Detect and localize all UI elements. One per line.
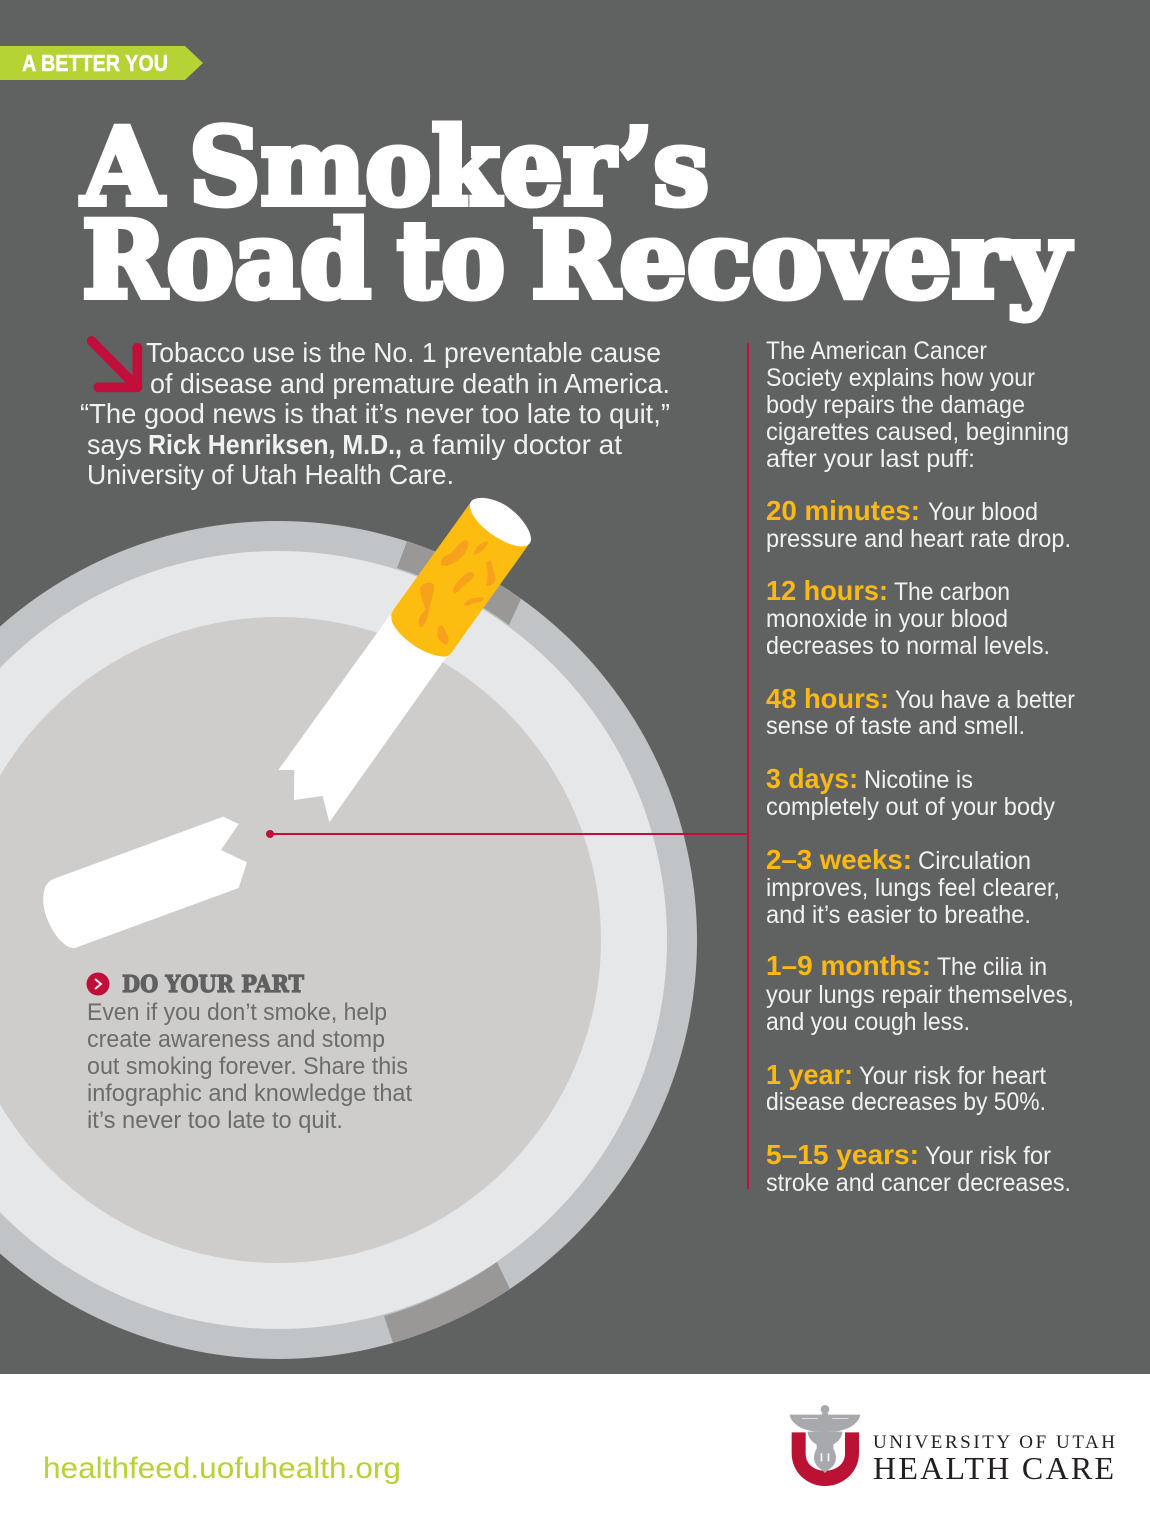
do your part callout: out smoking forever. Share this xyxy=(87,1053,408,1080)
milestone: 1-9 months xyxy=(766,950,1074,1036)
do your part callout: DO YOUR PART xyxy=(122,971,304,998)
title: Recovery xyxy=(531,197,1072,322)
logo wordmark xyxy=(873,1432,1115,1486)
footer band xyxy=(0,1374,1150,1518)
milestone: 5-15 years xyxy=(766,1139,1071,1197)
milestone: 1 year: disease decreases by 50%. xyxy=(766,1088,1046,1116)
intro text: “The good news is that it’s never too late to quit,” xyxy=(80,398,670,429)
intro text: says xyxy=(87,429,142,460)
milestone: 20 minutes: 20 minutes: xyxy=(766,495,920,526)
timeline connector xyxy=(266,343,749,1189)
milestone: 12 hours: 12 hours: xyxy=(766,575,888,606)
cigarette: broken butt piece xyxy=(43,817,247,948)
milestone: 3 days: 3 days: xyxy=(766,763,858,794)
title: Road xyxy=(82,197,371,322)
milestone: 1 year: Your risk for heart xyxy=(859,1062,1046,1090)
milestone: 3 days: Nicotine is xyxy=(864,766,973,794)
logo wordmark: HEALTH CARE xyxy=(873,1450,1114,1486)
intro text: of disease and premature death in America. xyxy=(150,368,670,399)
website url: healthfeed.uofuhealth.org xyxy=(43,1452,401,1485)
logo icon xyxy=(790,1405,860,1486)
milestone: 3 days xyxy=(766,763,1055,821)
milestone: 48 hours: You have a better xyxy=(895,686,1075,714)
milestone: 1 year xyxy=(766,1059,1046,1116)
do your part callout: it’s never too late to quit. xyxy=(87,1107,343,1134)
milestone: 12 hours: The carbon xyxy=(894,578,1010,606)
milestone: 20 minutes: pressure and heart rate drop. xyxy=(766,525,1071,553)
milestone: 48 hours xyxy=(766,683,1075,740)
title: Smoker’s xyxy=(189,104,709,229)
milestone: 2-3 weeks: 2–3 weeks: xyxy=(766,844,912,875)
timeline intro: cigarettes caused, beginning xyxy=(766,418,1069,446)
intro text: University of Utah Health Care. xyxy=(87,459,454,490)
timeline intro: The American Cancer xyxy=(766,337,987,365)
milestone: 1-9 months: 1–9 months: xyxy=(766,950,931,981)
milestone: 1-9 months: The cilia in xyxy=(937,953,1047,981)
milestone: 48 hours: 48 hours: xyxy=(766,683,889,714)
title xyxy=(81,104,1072,322)
milestone: 5-15 years: stroke and cancer decreases. xyxy=(766,1169,1071,1197)
intro text: a family doctor at xyxy=(409,429,622,460)
milestone: 2-3 weeks: Circulation xyxy=(918,847,1031,875)
milestone: 2-3 weeks: and it’s easier to breathe. xyxy=(766,901,1031,929)
ashtray xyxy=(0,521,697,1359)
milestone: 5-15 years: 5–15 years: xyxy=(766,1139,919,1170)
logo wordmark: UNIVERSITY OF UTAH xyxy=(873,1432,1115,1453)
timeline intro: after your last puff: xyxy=(766,445,975,473)
milestone: 12 hours: decreases to normal levels. xyxy=(766,632,1050,660)
cigarette: paper and filter xyxy=(278,498,531,822)
icon: red arrow xyxy=(92,341,137,387)
milestone: 2-3 weeks xyxy=(766,844,1060,929)
milestone: 1-9 months: your lungs repair themselves, xyxy=(766,981,1074,1009)
milestone: 2-3 weeks: improves, lungs feel clearer, xyxy=(766,874,1060,902)
title: A xyxy=(81,104,165,229)
milestone: 5-15 years: Your risk for xyxy=(925,1142,1051,1170)
title: to xyxy=(397,197,505,322)
intro text xyxy=(80,337,670,490)
intro text: Rick Henriksen, M.D., xyxy=(148,429,402,460)
milestone: 20 minutes: Your blood xyxy=(928,498,1038,526)
milestone: 12 hours: monoxide in your blood xyxy=(766,605,1008,633)
milestone: 20 minutes xyxy=(766,495,1071,553)
timeline intro: Society explains how your xyxy=(766,364,1035,392)
milestone: 1 year: 1 year: xyxy=(766,1059,853,1090)
timeline intro: body repairs the damage xyxy=(766,391,1025,419)
milestone: 1-9 months: and you cough less. xyxy=(766,1008,970,1036)
milestone: 3 days: completely out of your body xyxy=(766,793,1055,821)
milestone: 12 hours xyxy=(766,575,1050,660)
timeline intro xyxy=(766,337,1069,473)
do your part callout: Even if you don’t smoke, help xyxy=(87,999,387,1026)
do your part callout: infographic and knowledge that xyxy=(87,1080,412,1107)
do your part callout: create awareness and stomp xyxy=(87,1026,385,1053)
intro text: Tobacco use is the No. 1 preventable cause xyxy=(146,337,661,368)
do your part callout xyxy=(86,971,412,1134)
milestone: 48 hours: sense of taste and smell. xyxy=(766,712,1025,740)
category tag: A BETTER YOU xyxy=(22,50,168,76)
category tag xyxy=(0,46,203,80)
